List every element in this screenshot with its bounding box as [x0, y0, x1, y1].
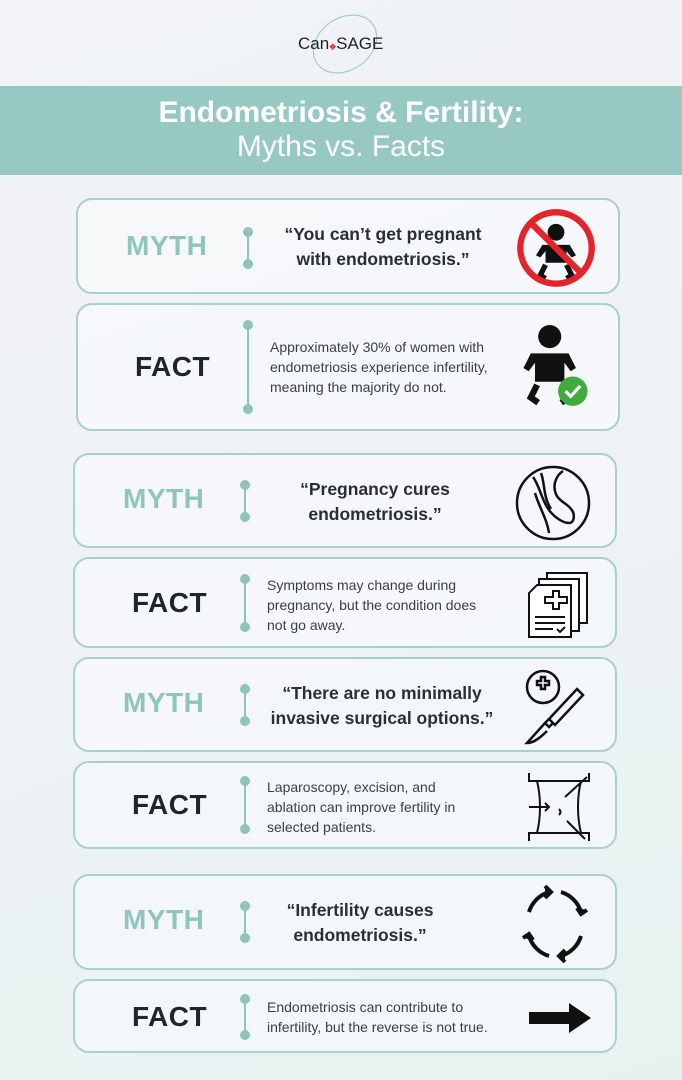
panel: fact 2: FACT: [132, 587, 207, 618]
logo: [298, 14, 383, 74]
panel: myth 3: [73, 657, 617, 752]
panel: myth 3: MYTH: [123, 687, 204, 718]
panel: myth 4: MYTH: [123, 904, 204, 935]
icon: pregnant silhouette: [516, 466, 590, 540]
panel: fact 2: Symptoms may change during pregnancy, but the condition does not go away.: [267, 577, 476, 633]
logo: Can◆SAGE: [298, 34, 383, 53]
panel: fact 3: [73, 761, 617, 849]
panel: myth 3: “There are no minimally invasive surgical options.”: [271, 683, 493, 728]
panel: myth 4: “Infertility causes endometriosis.”: [287, 900, 433, 945]
panel: myth 2: “Pregnancy cures endometriosis.”: [300, 479, 450, 524]
panel: fact 1: Approximately 30% of women with endometriosis experience infertility, meaning the majority do not.: [270, 339, 488, 395]
panel: myth 1: [76, 198, 620, 294]
header band: Endometriosis & Fertility:: [158, 96, 524, 129]
icon: no baby: [517, 209, 595, 287]
panel: fact 1: FACT: [135, 351, 210, 382]
icon: laparoscopy: [528, 773, 590, 841]
icon: cycle arrows: [522, 884, 588, 964]
panel: fact 4: FACT: [132, 1001, 207, 1032]
icon: baby check: [524, 325, 588, 406]
panel: fact 3: Laparoscopy, excision, and ablation can improve fertility in selected patients.: [267, 779, 455, 835]
icon: medical documents: [528, 572, 588, 638]
icon: right arrow: [529, 1003, 591, 1033]
panel: fact 4: Endometriosis can contribute to infertility, but the reverse is not true.: [267, 999, 488, 1035]
panel: myth 2: MYTH: [123, 483, 204, 514]
panel: myth 4: [73, 874, 617, 970]
panel: fact 4: [73, 979, 617, 1053]
panel: myth 1: MYTH: [126, 230, 207, 261]
panel: myth 2: [73, 453, 617, 548]
panel: fact 2: [73, 557, 617, 648]
panel: fact 1: [76, 303, 620, 431]
icon: scalpel: [524, 670, 585, 744]
header band: [0, 86, 682, 175]
panel: myth 1: “You can’t get pregnant with endometriosis.”: [284, 224, 482, 269]
header band: Myths vs. Facts: [237, 130, 445, 163]
panel: fact 3: FACT: [132, 789, 207, 820]
